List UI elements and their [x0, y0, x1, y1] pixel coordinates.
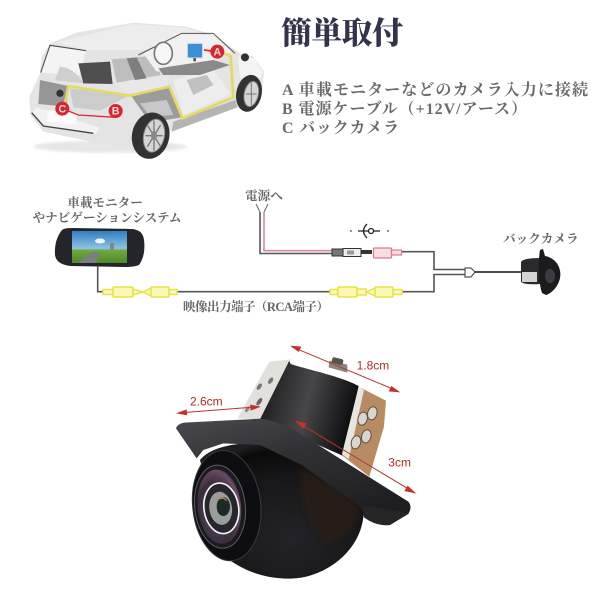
camera cylinder: [260, 361, 359, 456]
black power plug: [332, 248, 372, 256]
power connector to camera wire: [402, 252, 465, 270]
lens pupil: [217, 497, 230, 516]
copper circuit board: [342, 387, 386, 477]
dome reflection: [300, 468, 360, 543]
large camera photo: [176, 346, 416, 579]
mounting flange: [176, 419, 410, 525]
marker C: C: [58, 103, 66, 115]
label: to power: 電源へ: [245, 188, 283, 203]
ground shadow: [33, 141, 187, 153]
lens aperture: [207, 490, 234, 526]
car body: [29, 23, 264, 148]
flange lower tab: [362, 505, 408, 525]
roof highlight: [55, 24, 203, 50]
lens assembly: [187, 447, 266, 564]
dimension 3cm: [295, 421, 416, 494]
wiring diagram: [32, 188, 579, 314]
note C: C バックカメラ: [282, 119, 399, 137]
dimension 2.6cm: [176, 394, 261, 415]
ground symbol: [350, 224, 388, 238]
front wheel: [233, 72, 265, 114]
cable fork: [256, 204, 268, 212]
dimension 2.6cm: 2.6cm: [190, 394, 223, 408]
note B: B 電源ケーブル（+12V/アース）: [282, 99, 527, 118]
rear window and interior: [38, 33, 249, 132]
yellow video cable route: [65, 53, 233, 118]
lens glass: [194, 467, 245, 546]
label: vehicle monitor: 車載モニター: [67, 195, 143, 210]
installation notes: [282, 80, 588, 137]
car cutaway illustration: [29, 23, 265, 162]
icon: small back camera: [521, 249, 560, 295]
power cable red: [264, 212, 332, 251]
red power cable route: [62, 109, 116, 117]
dome housing: [200, 443, 364, 579]
camera cable: [475, 271, 521, 273]
title: 簡単取付: [281, 16, 403, 51]
yellow RCA connectors right: [330, 287, 402, 297]
marker A: A: [213, 46, 221, 58]
lens white ring: [201, 481, 242, 536]
lens inner ring: [190, 463, 250, 551]
marker B: B: [112, 106, 120, 118]
pink power plug: [374, 248, 402, 258]
label: video output: 映像出力端子（RCA端子）: [183, 299, 329, 314]
rear bumper and plate: [32, 107, 99, 134]
dimension 3cm: 3cm: [388, 456, 411, 470]
video cable: [98, 266, 465, 292]
marker C: [55, 102, 69, 116]
rear wheel: [128, 109, 174, 162]
note A: A 車載モニターなどのカメラ入力に接続: [282, 80, 588, 99]
lens outer ring: [187, 447, 266, 564]
top connector nub: [329, 357, 347, 373]
label: back camera: バックカメラ: [503, 232, 579, 246]
marker B: [109, 104, 123, 118]
left metal bracket: [237, 359, 291, 419]
monitor icon in car: [187, 43, 203, 61]
dimension 1.8cm: [290, 346, 400, 392]
hood highlight: [238, 57, 263, 80]
power cable black: [260, 212, 332, 254]
label: vehicle monitor: やナビゲーションシステム: [32, 211, 182, 225]
camera joint: [465, 268, 475, 277]
icon: mirror monitor: [55, 228, 144, 267]
dimension 1.8cm: 1.8cm: [357, 358, 389, 372]
marker A: [204, 45, 224, 59]
label: vehicle monitor: [32, 195, 182, 225]
yellow RCA connectors left: [103, 287, 177, 297]
